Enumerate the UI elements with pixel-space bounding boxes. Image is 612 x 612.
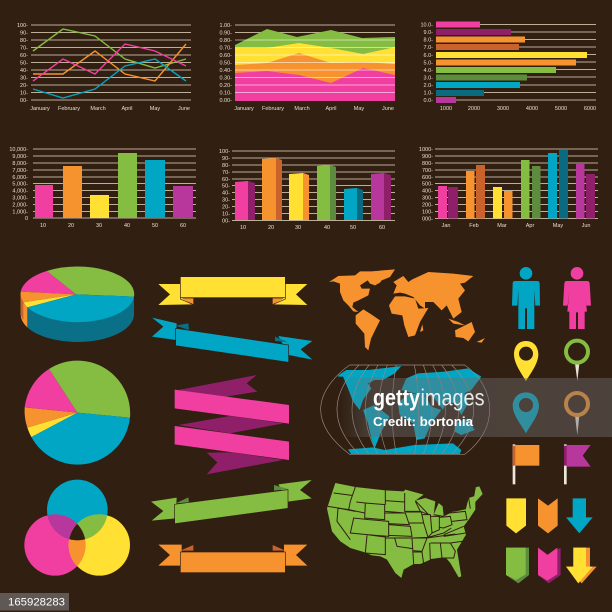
icon: teal map pin: [513, 392, 539, 433]
column chart: 4,000-: [12, 188, 28, 194]
line chart: 100-: [17, 23, 28, 29]
area chart: 0.10-: [219, 90, 232, 96]
world map: globe projection: [321, 365, 490, 454]
area chart: May: [354, 106, 364, 112]
3D column chart: 100-: [219, 149, 230, 155]
horizontal bar chart: 4000: [526, 106, 538, 112]
icon: orange push pin: [566, 393, 588, 435]
area chart: 0.70-: [219, 46, 232, 52]
3D column chart: 90-: [222, 156, 230, 162]
area chart: 0.40-: [219, 68, 232, 74]
column chart: 2,000-: [12, 202, 28, 208]
grouped column chart: 600-: [422, 175, 433, 181]
3D column chart: 40-: [222, 190, 230, 196]
3D column chart: 70-: [222, 170, 230, 176]
grouped column chart: 700-: [422, 168, 433, 174]
icon: man: [512, 267, 540, 329]
icon: woman: [563, 267, 591, 329]
image id label: 165928283: [8, 596, 65, 608]
horizontal bar chart: 7.0-: [424, 45, 433, 51]
grouped column chart: May: [553, 223, 563, 229]
horizontal bar chart: 2000: [468, 106, 480, 112]
column chart: 10: [40, 223, 46, 229]
usa map: [327, 483, 483, 578]
line chart: February: [58, 106, 80, 112]
line chart: [17, 23, 191, 112]
watermark band: [340, 378, 612, 437]
ribbon: green: [151, 480, 312, 524]
area chart: 0.80-: [219, 38, 232, 44]
grouped column chart: 900-: [422, 154, 433, 160]
column chart: 20: [68, 223, 74, 229]
grouped column chart: Apr: [526, 223, 534, 229]
watermark text: getty: [373, 384, 420, 410]
column chart: 3,000-: [12, 196, 28, 202]
3D column chart: 80-: [222, 163, 230, 169]
horizontal bar chart: 8.0-: [424, 38, 433, 44]
icon: yellow tag: [506, 498, 526, 533]
horizontal bar chart: 1.0-: [424, 90, 433, 96]
3D column chart: [219, 149, 395, 231]
3D column chart: 60: [379, 225, 385, 231]
line chart: 70-: [20, 46, 28, 52]
3D column chart: 60-: [222, 177, 230, 183]
line chart: 40-: [20, 68, 28, 74]
area chart: February: [262, 106, 284, 112]
area chart: June: [382, 106, 394, 112]
horizontal bar chart: 6.0-: [424, 53, 433, 59]
column chart: 5,000-: [12, 182, 28, 188]
line chart: April: [121, 106, 133, 112]
grouped column chart: Jun: [582, 223, 590, 229]
world map: orange: [329, 269, 485, 350]
icon: green tag: [506, 548, 529, 583]
3D column chart: 10-: [222, 212, 230, 218]
area chart: [219, 23, 395, 112]
3D column chart: 30-: [222, 198, 230, 204]
area chart: 1.00-: [219, 23, 232, 29]
grouped column chart: 200-: [422, 202, 433, 208]
icon: purple flag: [564, 444, 591, 484]
ribbon: pink folded: [175, 375, 289, 474]
grouped column chart: Feb: [469, 223, 479, 229]
area chart: 0.60-: [219, 53, 232, 59]
icon: green push pin: [566, 341, 588, 381]
flat pie chart: [25, 361, 130, 465]
line chart: 80-: [20, 38, 28, 44]
column chart: 0: [25, 216, 28, 222]
grouped column chart: 1000-: [419, 147, 433, 153]
ribbon: orange: [158, 545, 307, 573]
venn diagram: [24, 480, 130, 576]
column chart: 7,000-: [12, 168, 28, 174]
line chart: January: [30, 106, 50, 112]
icon: orange chevron tag: [538, 498, 558, 533]
grouped column chart: 500-: [422, 182, 433, 188]
column chart: 9,000-: [12, 154, 28, 160]
watermark text: Credit: bortonia: [373, 415, 474, 429]
icon: teal arrow: [566, 498, 593, 533]
icon: orange flag: [513, 444, 539, 484]
horizontal bar chart: 0.0-: [424, 98, 433, 104]
grouped column chart: Jan: [442, 223, 450, 229]
line chart: 30-: [20, 76, 28, 82]
grouped column chart: 800-: [422, 161, 433, 167]
column chart: 50: [152, 223, 158, 229]
column chart: 6,000-: [12, 175, 28, 181]
grouped column chart: Mar: [497, 223, 507, 229]
icon: yellow map pin: [514, 341, 538, 381]
horizontal bar chart: 2.0-: [424, 83, 433, 89]
horizontal bar chart: 6000: [584, 106, 596, 112]
ribbon: teal: [152, 318, 312, 362]
3D column chart: 20-: [222, 204, 230, 210]
line chart: June: [178, 106, 190, 112]
line chart: 90-: [20, 30, 28, 36]
3D column chart: 30: [295, 225, 301, 231]
grouped column chart: [419, 147, 598, 229]
3D column chart: 00-: [222, 218, 230, 224]
line chart: 10-: [20, 90, 28, 96]
area chart: January: [234, 106, 254, 112]
column chart: [9, 147, 196, 229]
area chart: 0.90-: [219, 30, 232, 36]
horizontal bar chart: [420, 22, 596, 112]
horizontal bar chart: 1000: [440, 106, 452, 112]
area chart: 0.20-: [219, 83, 232, 89]
column chart: 30: [96, 223, 102, 229]
horizontal bar chart: 5000: [555, 106, 567, 112]
column chart: 60: [180, 223, 186, 229]
area chart: 0.30-: [219, 76, 232, 82]
line chart: March: [90, 106, 106, 112]
grouped column chart: 300-: [422, 196, 433, 202]
horizontal bar chart: 5.0-: [424, 60, 433, 66]
line chart: 20-: [20, 83, 28, 89]
ribbon: yellow: [158, 277, 307, 305]
line chart: May: [150, 106, 160, 112]
horizontal bar chart: 9.0-: [424, 30, 433, 36]
3D column chart: 40: [324, 225, 330, 231]
3D column chart: 10: [240, 225, 246, 231]
column chart: 10,000-: [9, 147, 28, 153]
horizontal bar chart: 3.0-: [424, 76, 433, 82]
icon: yellow arrow: [566, 548, 597, 583]
area chart: April: [325, 106, 337, 112]
line chart: 00-: [20, 98, 28, 104]
column chart: 40: [124, 223, 130, 229]
grouped column chart: 100-: [422, 210, 433, 216]
line chart: 50-: [20, 60, 28, 66]
column chart: 1,000-: [12, 210, 28, 216]
watermark text: images: [420, 384, 484, 410]
watermark text: [373, 384, 484, 429]
area chart: 0.00-: [219, 98, 232, 104]
column chart: 8,000-: [12, 161, 28, 167]
grouped column chart: 400-: [422, 188, 433, 194]
image id label: [0, 593, 69, 610]
grouped column chart: 000-: [422, 216, 433, 222]
horizontal bar chart: 4.0-: [424, 68, 433, 74]
3D column chart: 50: [350, 225, 356, 231]
3D pie chart: [21, 267, 134, 342]
area chart: 0.50-: [219, 60, 232, 66]
horizontal bar chart: 3000: [497, 106, 509, 112]
horizontal bar chart: 10.0-: [420, 22, 433, 28]
3D column chart: 20: [268, 225, 274, 231]
line chart: 60-: [20, 53, 28, 59]
area chart: March: [294, 106, 310, 112]
icon: pink chevron tag: [538, 548, 561, 583]
3D column chart: 50-: [222, 184, 230, 190]
